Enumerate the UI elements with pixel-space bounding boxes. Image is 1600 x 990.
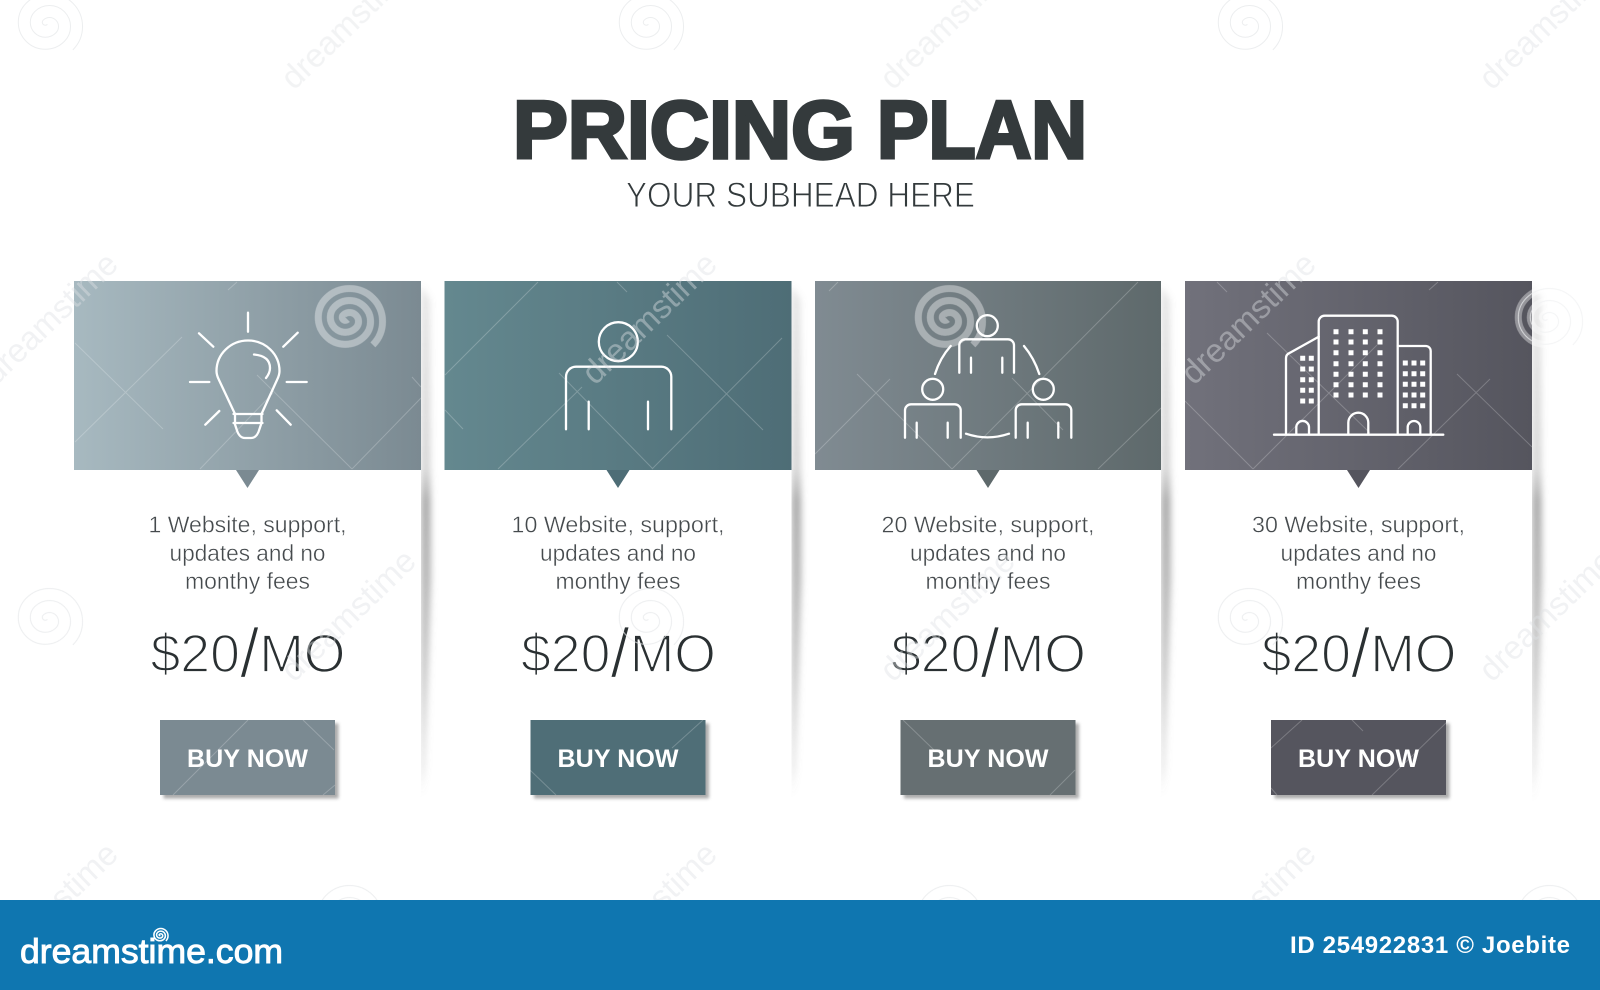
subhead: YOUR SUBHEAD HERE [626, 176, 975, 215]
watermark crossing lines [75, 282, 1532, 795]
footer logo spiral [151, 926, 171, 945]
button 2: BUY NOW [558, 745, 679, 773]
pointer 1 [236, 470, 259, 488]
watermark text: dreamstime [273, 542, 423, 688]
description 1: updates and no [170, 540, 326, 566]
title [513, 85, 1087, 176]
icon: light bulb [190, 313, 307, 438]
description 4: updates and no [1280, 540, 1436, 566]
price 2: $20 [521, 624, 611, 684]
button 2 [530, 720, 709, 798]
price 1: MO [259, 624, 346, 684]
price 2: MO [630, 624, 716, 684]
price 4: $20 [1262, 624, 1352, 684]
icon: office buildings [1274, 316, 1443, 435]
description 3: updates and no [910, 540, 1066, 566]
button 1 [160, 720, 338, 798]
price 2: / [610, 614, 630, 692]
panel: plan 3 [815, 281, 1171, 798]
price 3: / [980, 614, 1000, 692]
watermark text: dreamstime [574, 835, 724, 981]
price 1: $20 [150, 624, 241, 684]
header band 1 [74, 281, 421, 470]
button 3: BUY NOW [928, 745, 1049, 773]
image id and credit: ID 254922831 © Joebite [1290, 932, 1570, 959]
price 3: MO [1000, 624, 1086, 684]
title: PLAN [877, 85, 1087, 176]
button 3 [900, 720, 1079, 798]
price 4: / [1351, 614, 1371, 692]
description 1: monthy fees [185, 568, 310, 594]
header band 2 [444, 281, 792, 470]
description 4: 30 Website, support, [1252, 512, 1465, 538]
title: PRICING [513, 85, 855, 176]
panel: plan 1 [74, 281, 431, 798]
button 4 [1271, 720, 1450, 798]
watermark text: dreamstime [1173, 245, 1323, 391]
price 4: MO [1370, 624, 1456, 684]
header band 3 [815, 281, 1161, 470]
price 3: $20 [891, 624, 981, 684]
button 4: BUY NOW [1298, 745, 1419, 773]
description 2: 10 Website, support, [512, 512, 724, 538]
description 3: 20 Website, support, [882, 512, 1094, 538]
header band 4 [1185, 281, 1532, 470]
panel: plan 4 [1185, 281, 1542, 801]
price 1: / [240, 614, 260, 692]
footer band [0, 900, 1600, 990]
description 3: monthy fees [926, 568, 1050, 594]
description 3 [882, 512, 1094, 594]
description 4: monthy fees [1296, 568, 1421, 594]
pointer 3 [976, 470, 1000, 488]
description 2: updates and no [540, 540, 696, 566]
panel: plan 2 [444, 281, 802, 798]
watermark text: dreamstime [574, 245, 724, 391]
footer logo text: dreamstime.com [20, 933, 283, 971]
description 1: 1 Website, support, [148, 512, 346, 538]
description 2 [512, 512, 724, 594]
watermark text: dreamstime [1173, 835, 1323, 981]
pointer 4 [1347, 470, 1370, 488]
button 1: BUY NOW [187, 745, 308, 773]
icon: team of three [905, 315, 1071, 438]
pointer 2 [606, 470, 630, 488]
description 1 [148, 512, 346, 594]
description 4 [1252, 512, 1465, 594]
watermark text: dreamstime [872, 542, 1022, 688]
description 2: monthy fees [556, 568, 680, 594]
icon: single person [566, 322, 671, 429]
